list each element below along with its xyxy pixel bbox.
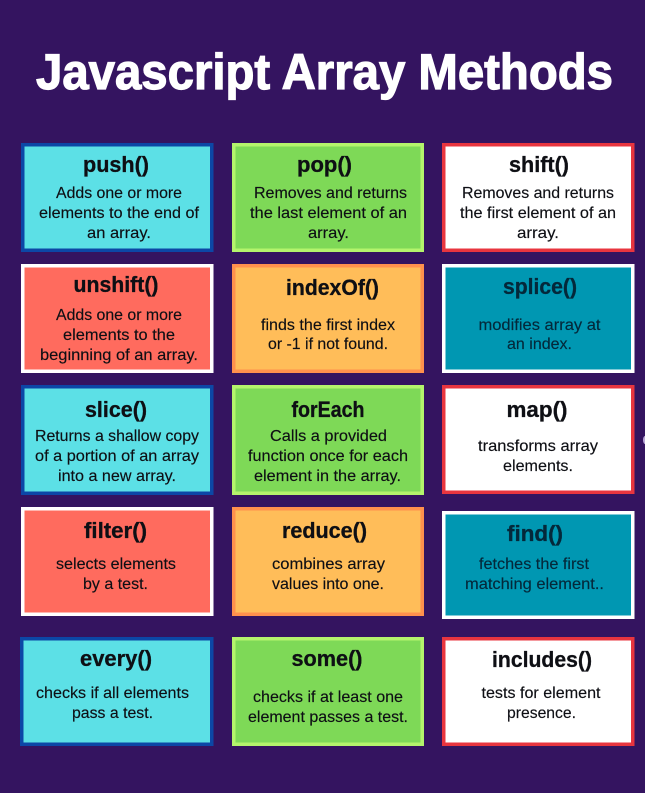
card: includes [444,639,633,744]
card: shift [444,145,633,250]
card: includes: presence. [507,705,576,722]
card: some: some() [292,646,362,671]
card: pop: pop() [297,152,352,177]
card: reduce [234,509,422,614]
card: find [444,513,633,617]
card: slice: slice() [85,397,147,422]
card: unshift: unshift() [74,272,158,297]
card: every: every() [80,646,152,671]
card: includes: tests for element [482,685,601,702]
card: reduce: combines array [272,556,385,573]
card: shift: the first element of an [460,205,616,222]
card: find: matching element.. [465,576,604,593]
card: find: find() [507,521,563,546]
card: some: checks if at least one [253,689,403,706]
card: push: an array. [87,225,151,242]
card: forEach [234,387,422,493]
card: splice [444,266,633,371]
card: unshift: beginning of an array. [40,347,198,364]
card: every [22,639,212,744]
card: filter: filter() [84,518,147,543]
card: map: elements. [503,458,573,475]
card: slice: Returns a shallow copy [35,428,199,445]
card: splice: modifies array at [478,317,601,334]
card: every: checks if all elements [36,685,189,702]
card: filter: by a test. [83,576,148,593]
card: filter: selects elements [56,556,176,573]
card: reduce: reduce() [282,518,367,543]
card: find: fetches the first [479,556,590,573]
card: includes: includes() [492,647,592,672]
card: splice: splice() [503,274,577,299]
card: push [23,145,212,250]
card: map: transforms array [478,438,598,455]
card: push: elements to the end of [39,205,200,222]
card: forEach: function once for each [248,448,408,465]
card: indexOf [234,266,422,371]
card: unshift: elements to the [63,327,175,344]
card: slice: into a new array. [58,468,176,485]
card: forEach: forEach [292,397,364,422]
card: unshift [23,266,212,371]
card: shift: array. [517,225,559,242]
card: splice: an index. [507,336,572,353]
card: some: element passes a test. [248,709,408,726]
card: pop: the last element of an [250,205,407,222]
card: map [444,387,633,492]
card: indexOf: indexOf() [286,275,379,300]
card: some [234,639,422,744]
title: Javascript Array Methods [36,44,613,100]
card: forEach: element in the array. [254,468,401,485]
card: pop [234,145,422,250]
card: pop: array. [308,225,349,242]
card: every: pass a test. [72,705,153,722]
card: filter [23,509,212,614]
card: push: push() [83,152,149,177]
card: pop: Removes and returns [254,185,407,202]
card: map: map() [506,397,568,422]
card: shift: Removes and returns [462,185,614,202]
card: forEach: Calls a provided [270,428,387,445]
card: indexOf: or -1 if not found. [268,336,388,353]
card: slice [23,387,212,493]
card: push: Adds one or more [56,185,182,202]
card: reduce: values into one. [272,576,384,593]
card: unshift: Adds one or more [56,307,182,324]
card: slice: of a portion of an array [35,448,199,465]
card: shift: shift() [509,152,569,177]
card: indexOf: finds the first index [261,317,395,334]
